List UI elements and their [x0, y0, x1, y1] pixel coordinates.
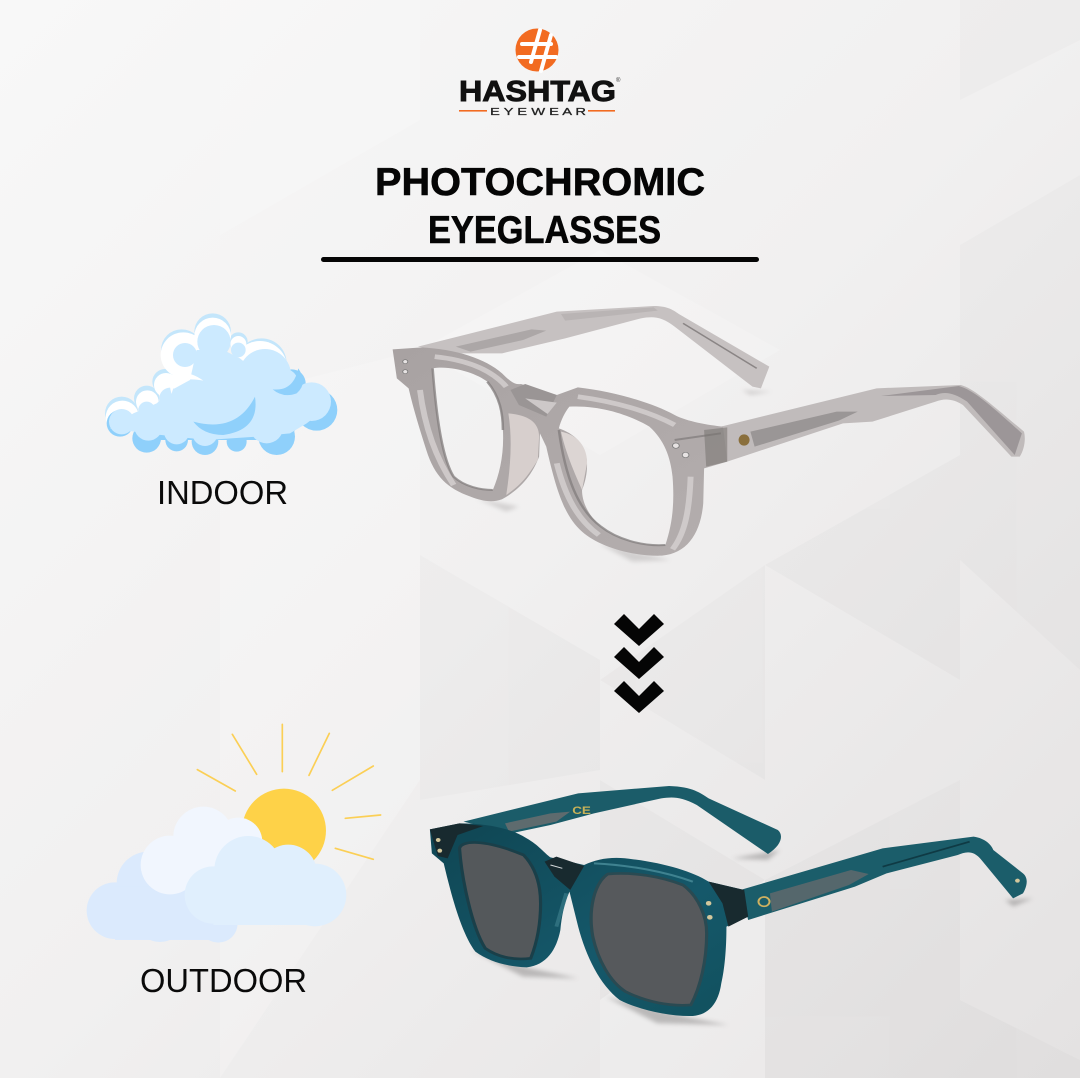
sun: [242, 789, 326, 873]
icon: clear eyeglasses: [393, 306, 1025, 562]
middle cloud: [141, 807, 262, 894]
title underline: [321, 257, 759, 262]
label: outdoor: OUTDOOR: [140, 962, 307, 999]
bridge: [510, 384, 557, 417]
CE mark: CE: [572, 804, 591, 817]
pale edge: [105, 313, 287, 430]
front cloud: [185, 836, 346, 926]
label: indoor: INDOOR: [157, 474, 288, 511]
near temple: [740, 837, 1027, 920]
shadow: [477, 390, 771, 562]
far temple: [418, 306, 769, 388]
logo mark: [516, 28, 558, 72]
back cloud: [87, 852, 238, 943]
right lens: [591, 873, 707, 1005]
frame highlights: [420, 357, 691, 549]
near temple: [721, 385, 1025, 462]
registered mark: ®: [616, 77, 621, 84]
title: [375, 161, 705, 252]
sun rays: [197, 724, 381, 859]
white crescents: [106, 318, 287, 434]
icon: sun and clouds: [87, 724, 381, 943]
icon: indoor cloud: [105, 313, 337, 455]
title: EYEGLASSES: [428, 209, 661, 252]
frame dark accents: [433, 368, 721, 545]
white swoosh: [170, 372, 203, 394]
rivets and emblem: [403, 360, 689, 458]
nose pads: [506, 413, 539, 495]
arrows: three chevrons down: [614, 614, 664, 713]
left lens: [460, 842, 541, 959]
logo tagline: E Y E W E A R: [490, 106, 587, 118]
icon: tinted sunglasses: [430, 786, 1033, 1025]
shadow crescents: [193, 397, 256, 435]
logo: [459, 28, 621, 118]
logo wordmark: HASHTAG: [459, 76, 616, 108]
shadow base: [107, 369, 337, 455]
title: PHOTOCHROMIC: [375, 161, 705, 204]
shadow: [471, 850, 1033, 1025]
frame dark accents: [430, 823, 748, 927]
far temple: [463, 786, 781, 854]
rivets and emblem: [436, 838, 1020, 920]
cloud body: [109, 325, 331, 446]
front frame: [393, 347, 727, 556]
front frame: [430, 823, 748, 1016]
